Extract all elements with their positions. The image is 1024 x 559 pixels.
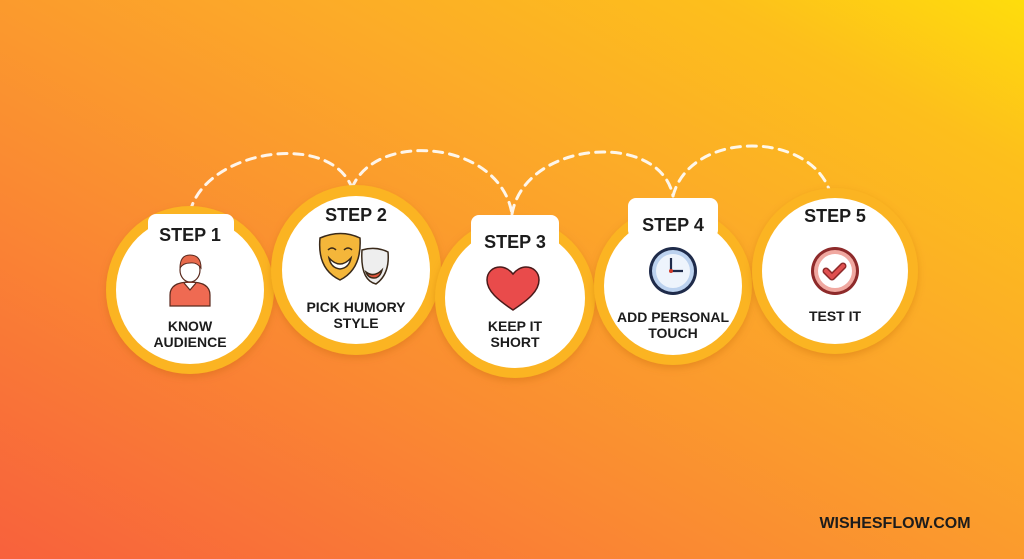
step 1 card: AUDIENCE <box>153 334 227 350</box>
icon: theatre masks <box>320 234 388 284</box>
step 1 card: STEP 1 <box>159 225 221 245</box>
icon: person <box>170 255 210 306</box>
step 2 card: PICK HUMORY <box>306 299 406 315</box>
step 1 card <box>106 206 274 374</box>
step 4 card <box>594 198 752 365</box>
icon: clock <box>649 247 697 295</box>
step 4 card: ADD PERSONAL <box>617 309 729 325</box>
step 5 card: STEP 5 <box>804 206 866 226</box>
step 5 card: TEST IT <box>809 308 861 324</box>
icon: check circle <box>811 247 859 295</box>
step 3 card: KEEP IT <box>488 318 543 334</box>
step 3 card <box>435 215 595 378</box>
step 4 card: STEP 4 <box>642 215 704 235</box>
step 2 card: STEP 2 <box>325 205 387 225</box>
step 2 card <box>271 185 441 355</box>
brand footer: WISHESFLOW.COM <box>819 515 971 532</box>
dashed connector arcs <box>190 146 830 214</box>
step 1 card: KNOW <box>168 318 213 334</box>
step 5 card <box>752 188 918 354</box>
step 2 card: STYLE <box>333 315 379 331</box>
icon: heart <box>487 267 539 310</box>
step 3 card: STEP 3 <box>484 232 546 252</box>
step 4 card: TOUCH <box>648 325 698 341</box>
step 3 card: SHORT <box>490 334 540 350</box>
